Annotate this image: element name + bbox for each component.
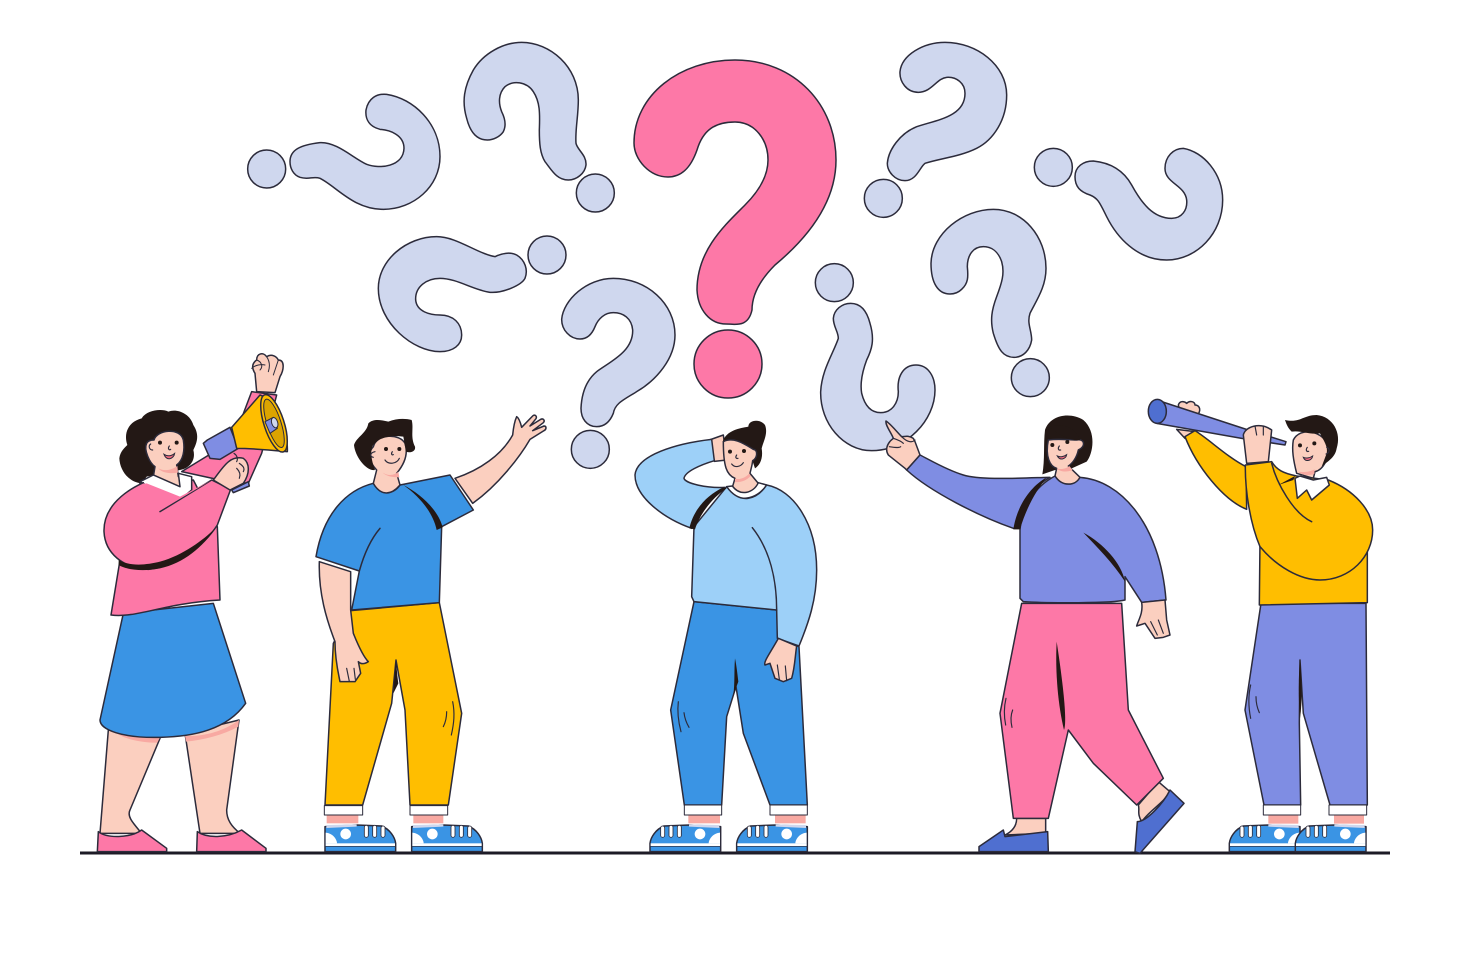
trousers — [1245, 603, 1367, 805]
hair back — [1042, 416, 1092, 474]
head — [723, 421, 766, 494]
question mark: sideways top left — [248, 94, 440, 209]
sneakers — [650, 824, 807, 852]
large pink question mark — [634, 60, 836, 398]
sweater — [689, 485, 817, 646]
legs — [100, 720, 240, 833]
person: man with telescope — [1148, 399, 1373, 852]
raised arm — [455, 415, 546, 503]
person: man waving — [316, 415, 546, 852]
question mark: upside down — [815, 264, 935, 451]
person: woman scratching head — [635, 421, 817, 852]
left figures — [97, 354, 546, 852]
person: woman with megaphone — [97, 354, 293, 852]
hand on head — [709, 435, 727, 461]
t-shirt — [316, 475, 473, 610]
ground line — [80, 852, 1390, 854]
arm and hand — [319, 562, 368, 682]
right group of lavender question marks — [815, 42, 1223, 451]
question mark: centre right — [931, 209, 1049, 397]
hair — [119, 410, 197, 483]
head — [354, 419, 415, 493]
lower hand — [765, 638, 797, 682]
raised arm with fist — [182, 354, 283, 483]
face — [1045, 425, 1084, 484]
torso — [111, 480, 220, 615]
face — [146, 431, 192, 500]
pointing hand — [886, 421, 920, 470]
raised sleeve — [635, 439, 725, 528]
big sleeve — [104, 480, 231, 569]
cuffs and ankles — [1263, 805, 1367, 824]
head — [1285, 415, 1338, 478]
sneakers — [325, 824, 482, 852]
trousers — [671, 602, 807, 805]
collar — [1295, 476, 1329, 500]
question mark: top, tilted — [464, 42, 614, 212]
megaphone — [203, 392, 293, 493]
crew neck — [727, 483, 767, 498]
cuffs and ankles — [684, 805, 807, 823]
hand holding megaphone — [213, 453, 248, 490]
front hand — [1243, 426, 1272, 463]
question mark: left middle — [378, 236, 566, 352]
strap shadow — [119, 528, 215, 570]
collar — [140, 473, 192, 503]
trousers — [1000, 603, 1163, 818]
sweater body — [1259, 540, 1367, 605]
lower hand — [1137, 600, 1170, 638]
arm sleeve — [907, 455, 1050, 528]
sneakers — [1229, 824, 1366, 852]
trouser cuffs and ankles — [324, 806, 448, 823]
trousers — [325, 603, 462, 805]
main sleeve and chest — [1245, 462, 1373, 580]
shoes — [97, 830, 266, 852]
telescope and rear hand — [1148, 399, 1286, 445]
sweater — [1013, 476, 1166, 603]
person: woman pointing — [886, 416, 1184, 853]
question mark: sideways far right — [1034, 148, 1223, 260]
question mark: lower middle — [562, 278, 675, 468]
skirt — [100, 603, 246, 737]
rear sleeve — [1185, 431, 1247, 509]
right figures — [886, 399, 1373, 853]
left group of lavender question marks — [248, 42, 675, 468]
question mark: top right — [864, 42, 1007, 217]
legs and shoes — [979, 782, 1184, 853]
